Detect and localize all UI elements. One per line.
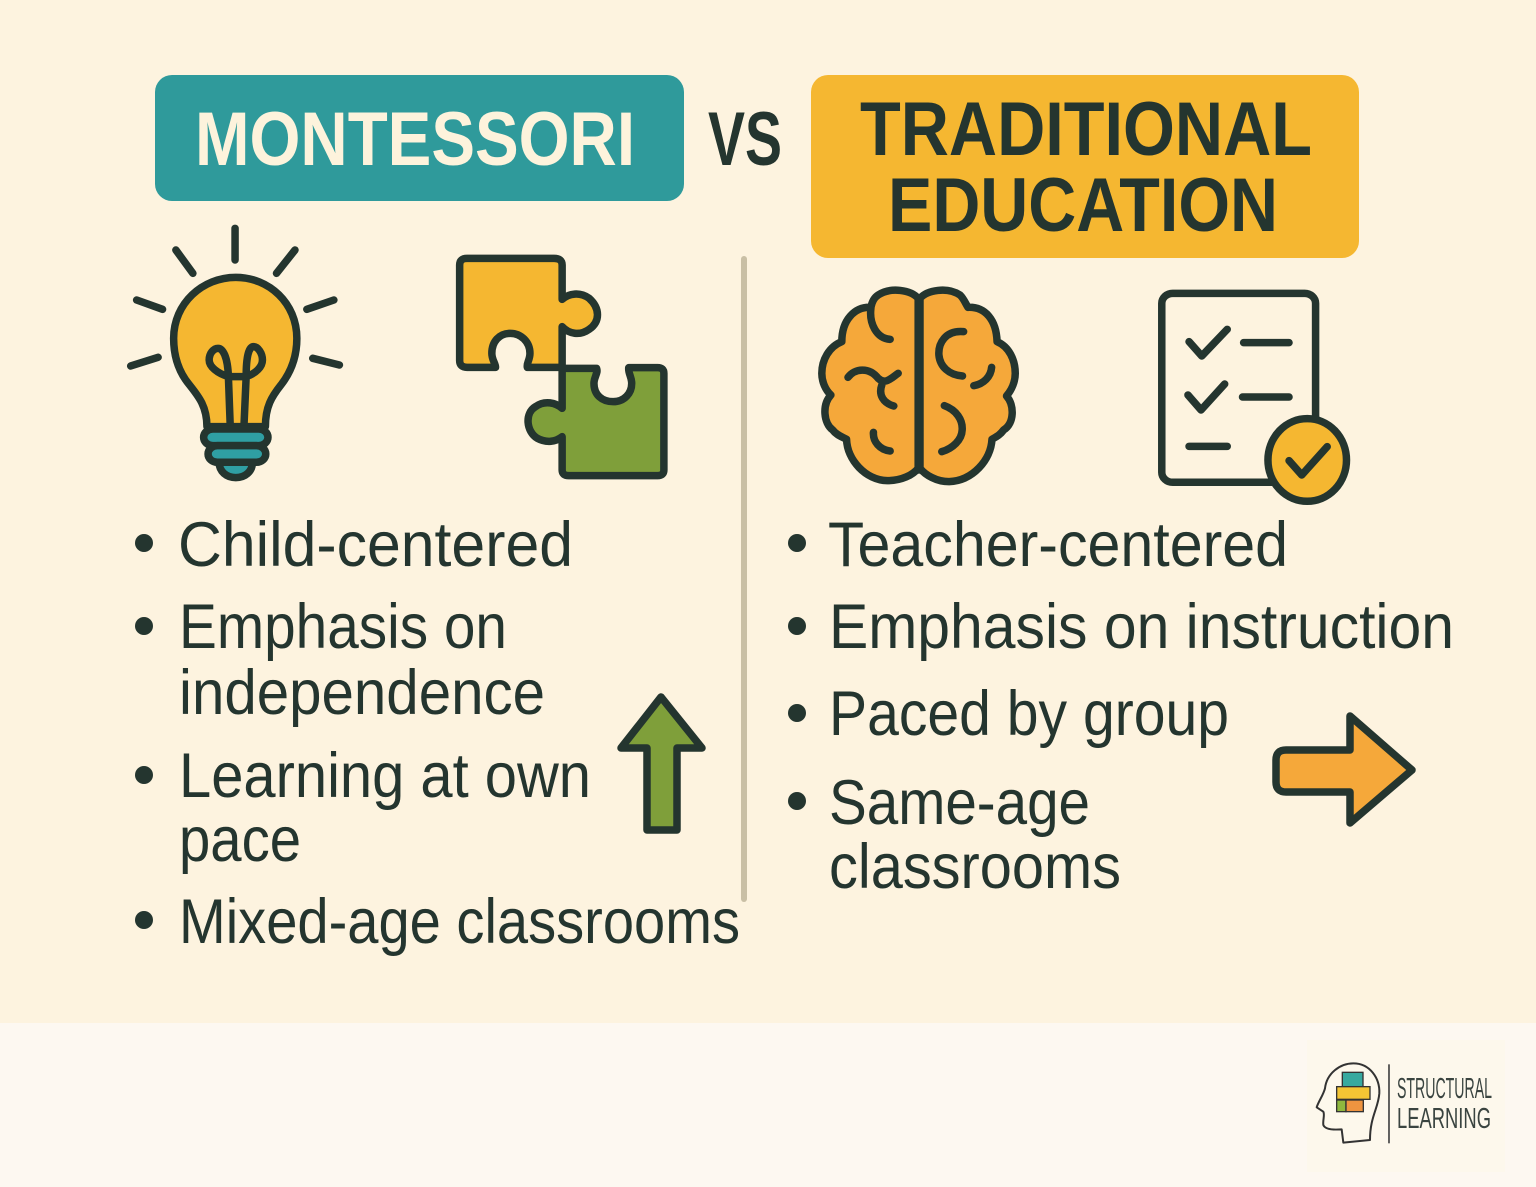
heading: Montessori: MONTESSORI — [195, 97, 635, 182]
heading: Traditional Education: EDUCATION — [888, 163, 1278, 248]
list: Montessori traits: Child-centered — [178, 510, 573, 580]
list: Traditional traits: Paced by group — [829, 679, 1229, 749]
list: Montessori traits: Emphasis on — [179, 592, 507, 662]
arrow: right — [1276, 716, 1412, 823]
icon: brain — [822, 290, 1015, 482]
heading: Traditional Education: TRADITIONAL — [860, 87, 1312, 172]
logo: Structural Learning — [1307, 1040, 1505, 1172]
icon: checklist — [1162, 293, 1346, 501]
list: Traditional traits: Teacher-centered — [828, 510, 1288, 580]
list: Traditional traits: Emphasis on instruction — [829, 592, 1454, 662]
heading: Traditional Education — [811, 75, 1359, 258]
list: Montessori traits — [135, 510, 740, 957]
heading: Montessori — [155, 75, 684, 201]
center divider — [741, 256, 747, 902]
list: Traditional traits: Same-age — [829, 768, 1090, 838]
list: Montessori traits: independence — [179, 658, 545, 728]
icon: light bulb — [131, 228, 339, 478]
list: Montessori traits: Learning at own — [179, 741, 591, 811]
list: Montessori traits: pace — [179, 805, 301, 875]
list: Montessori traits: Mixed-age classrooms — [179, 887, 740, 957]
arrow: up — [621, 697, 702, 830]
list: Traditional traits: classrooms — [829, 832, 1121, 902]
list: Traditional traits — [788, 510, 1454, 902]
heading: vs: VS — [708, 97, 782, 182]
icon: puzzle pieces — [460, 258, 664, 476]
